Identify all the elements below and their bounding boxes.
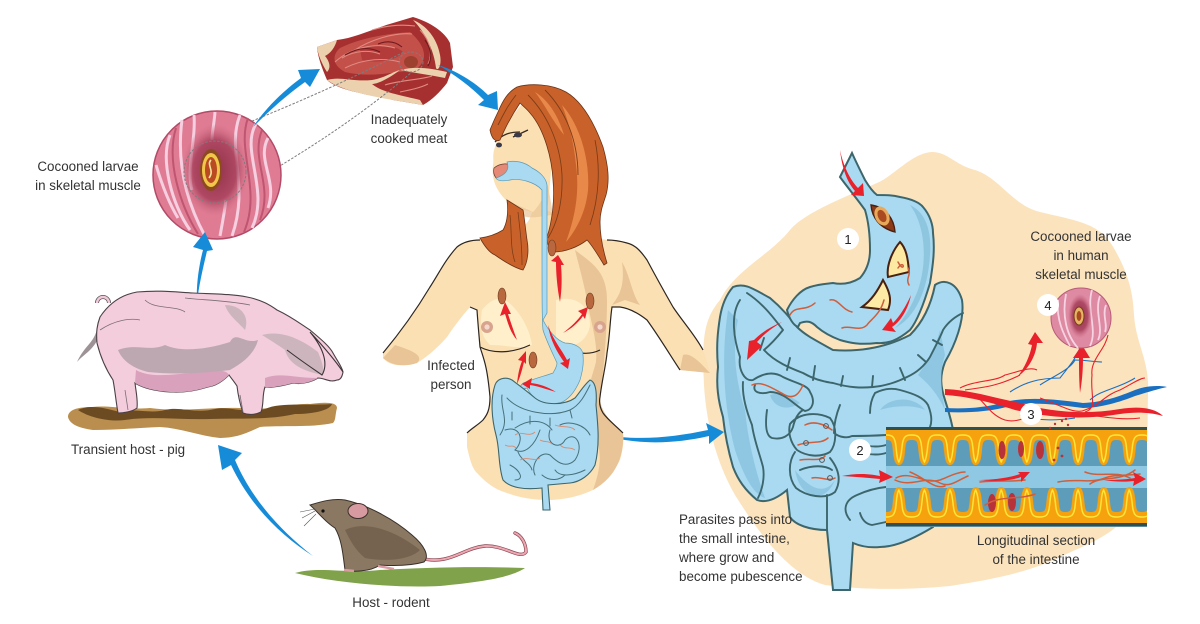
stomach: [787, 153, 934, 344]
beige background blob: [703, 152, 1148, 589]
human muscle circle: [1051, 288, 1111, 348]
magnifier dashed connector lines: [197, 52, 412, 190]
feet: [344, 566, 394, 571]
pig muscle circle with cocooned larva: [153, 111, 281, 239]
step number badges: 1: [844, 232, 852, 247]
label: parasites pass into the small intestine: become pubescence: [679, 569, 803, 584]
tail: [420, 533, 526, 560]
step number badges: 3: [1027, 407, 1035, 422]
pig: [68, 291, 343, 438]
label: inadequately cooked meat: Inadequately: [371, 112, 447, 127]
body shading: [118, 337, 258, 373]
pig tail: [77, 330, 100, 362]
skin shading: [383, 250, 710, 490]
arrow: meat to woman: [438, 65, 498, 110]
step number badges: 2: [856, 443, 864, 458]
opening cocoon: [888, 242, 909, 277]
label: parasites pass into the small intestine: where grow and: [678, 550, 774, 565]
label: transient host pig: Transient host - pig: [71, 442, 185, 457]
longitudinal section of intestine: [842, 418, 1147, 527]
enlarged colon and small intestine: [717, 150, 963, 590]
woman figure: [383, 85, 710, 510]
face: [493, 104, 555, 212]
emptied cocoon: [862, 280, 890, 310]
label: host rodent: Host - rodent: [352, 595, 430, 610]
ear: [348, 504, 368, 518]
meat illustration: [317, 17, 453, 105]
ground: [68, 403, 337, 438]
label: cocooned larvae in skeletal muscle: Cocooned larvae: [37, 159, 139, 174]
red stomach arrows: [840, 150, 864, 196]
label: longitudinal section: Longitudinal section: [977, 533, 1095, 548]
body: [310, 499, 426, 571]
label: infected person: Infected: [427, 358, 475, 373]
colon fold lines: [734, 293, 963, 411]
hair: [490, 85, 608, 265]
torso and arms: [383, 205, 710, 500]
step number badges: [837, 228, 1059, 461]
step number badges: 4: [1044, 298, 1052, 313]
cocoon in stomach: [871, 204, 895, 232]
chin shadow: [505, 185, 553, 217]
belly: [135, 370, 229, 392]
arrow: rodent to pig: [218, 445, 313, 556]
red body arrows: [500, 255, 588, 392]
intestines: [492, 378, 598, 510]
darker gut shading: [724, 310, 945, 498]
label: cocooned larvae in human skeletal muscle: skeletal muscle: [1035, 267, 1127, 282]
stomach and gut worms: [752, 262, 909, 479]
lips: [494, 164, 513, 179]
label: infected person: person: [431, 377, 471, 392]
label: longitudinal section: of the intestine: [992, 552, 1080, 567]
label: inadequately cooked meat: cooked meat: [371, 131, 448, 146]
label: cocooned larvae in human skeletal muscle: in human: [1053, 248, 1109, 263]
adult worms: [895, 470, 1140, 505]
red arrows to muscle: [1017, 332, 1090, 393]
rodent: [295, 499, 526, 586]
red intestine arrows: [842, 470, 893, 483]
blue tract: mouth, oesophagus, stomach: [496, 161, 583, 404]
parasites in villi: [988, 418, 1069, 512]
torso outline: [383, 240, 703, 433]
arrow: muscle to meat: [253, 69, 320, 127]
label: cocooned larvae in skeletal muscle: in skeletal muscle: [35, 178, 141, 193]
label: cocooned larvae in human skeletal muscle: Cocooned larvae: [1030, 229, 1132, 244]
label: parasites pass into the small intestine: the small intestine,: [679, 531, 790, 546]
arrow: body intestine to enlarged intestine: [593, 423, 724, 444]
nipples: [481, 321, 606, 333]
larva cocoons: [498, 240, 594, 368]
grass: [295, 567, 525, 586]
body: [97, 291, 343, 414]
blood vessels: [945, 335, 1167, 421]
arrow: pig to muscle: [193, 232, 213, 302]
label: parasites pass into the small intestine: Parasites pass into: [679, 512, 792, 527]
